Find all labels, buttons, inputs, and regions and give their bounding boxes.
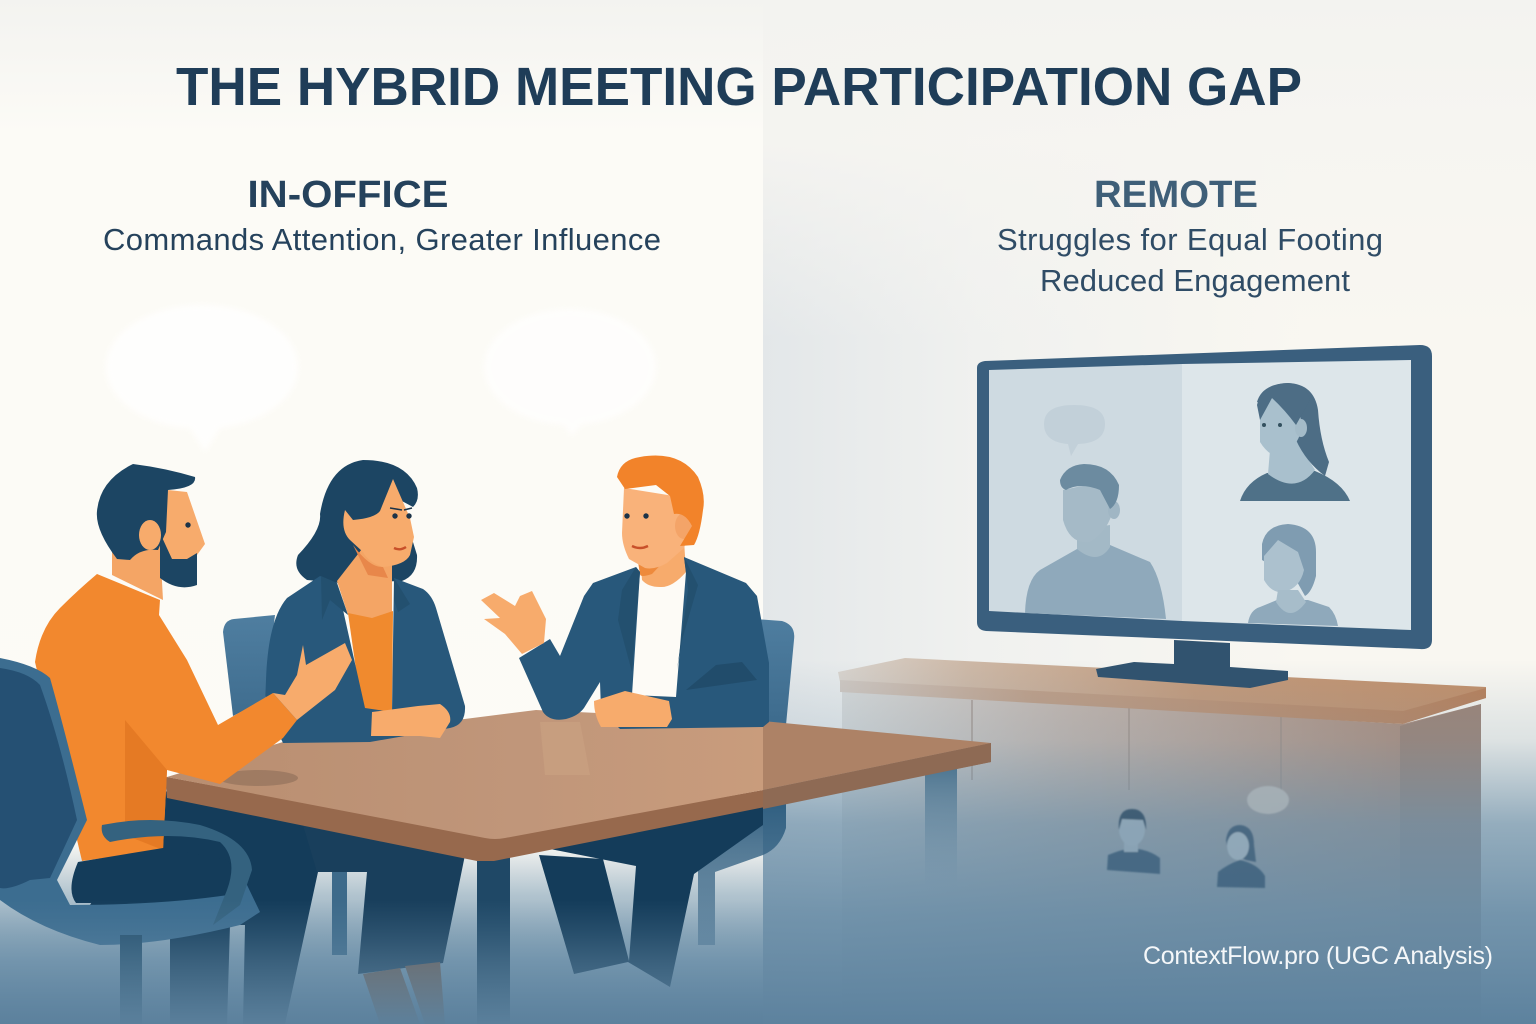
neck and chest	[337, 545, 392, 620]
woman's hand	[371, 704, 450, 738]
ear	[139, 520, 161, 550]
shirt and neck	[630, 556, 688, 700]
hair	[97, 464, 195, 560]
presenter's raised hand	[481, 591, 546, 654]
panel: in-office background	[0, 0, 763, 1024]
woman chair post	[332, 865, 347, 955]
panel: remote background	[763, 0, 1536, 1024]
face	[160, 490, 205, 570]
text: remote subtitle: Struggles for Equal Footing	[997, 222, 1383, 257]
table top	[165, 710, 991, 861]
small remote participant: man	[1107, 809, 1160, 874]
neck	[112, 545, 163, 600]
remote participant: man	[1025, 464, 1166, 619]
remote participant: woman with short hair	[1248, 524, 1338, 626]
title: THE HYBRID MEETING PARTICIPATION GAP	[176, 57, 1302, 117]
table right leg	[925, 762, 957, 892]
text: remote subtitle: Reduced Engagement	[1040, 263, 1350, 298]
text: in-office subtitle: Commands Attention, Greater Influence	[103, 222, 661, 257]
presenter legs	[530, 795, 763, 987]
blazer	[265, 576, 465, 743]
orange top	[348, 611, 393, 712]
chair behind woman	[223, 615, 275, 716]
icon: empty speech bubble left	[106, 305, 298, 452]
blazer	[519, 557, 769, 729]
small faded speech bubble	[1247, 786, 1289, 814]
monitor	[977, 345, 1432, 688]
woman legs and shoes	[300, 815, 480, 1024]
small remote participant: woman	[1217, 825, 1265, 888]
man thigh in seat	[71, 848, 236, 903]
icon: empty speech bubble right	[484, 309, 656, 436]
heading: in-office: IN-OFFICE	[248, 174, 448, 216]
man legs	[90, 790, 335, 1024]
person: man in orange sweater with beard	[35, 464, 352, 861]
sideboard	[838, 658, 1486, 1024]
presenter's resting hand	[594, 691, 672, 727]
remote participant: woman with long hair	[1240, 383, 1350, 501]
screen left video tile	[989, 364, 1182, 621]
heading: remote: REMOTE	[1094, 174, 1258, 216]
head	[622, 488, 694, 568]
beard	[160, 533, 197, 587]
hair back	[296, 460, 418, 583]
text: remote subtitle	[997, 222, 1383, 298]
chair behind presenter	[755, 619, 794, 725]
screen right video tile	[1182, 360, 1411, 630]
source credit: ContextFlow.pro (UGC Analysis)	[1143, 942, 1493, 970]
table center leg	[477, 855, 510, 1024]
remote speech bubble on screen	[1044, 405, 1105, 456]
person: woman in blazer	[265, 460, 465, 743]
sweater	[35, 574, 297, 861]
monitor stand	[1096, 640, 1288, 688]
bottom fog: left	[0, 900, 763, 1024]
person: presenter in blazer	[481, 456, 769, 729]
armrest	[102, 820, 252, 925]
presenter chair seat and post	[698, 800, 786, 945]
chair in foreground	[0, 658, 260, 1024]
bottom fog: right	[763, 660, 1536, 1024]
face	[343, 479, 414, 567]
hand	[273, 643, 352, 720]
